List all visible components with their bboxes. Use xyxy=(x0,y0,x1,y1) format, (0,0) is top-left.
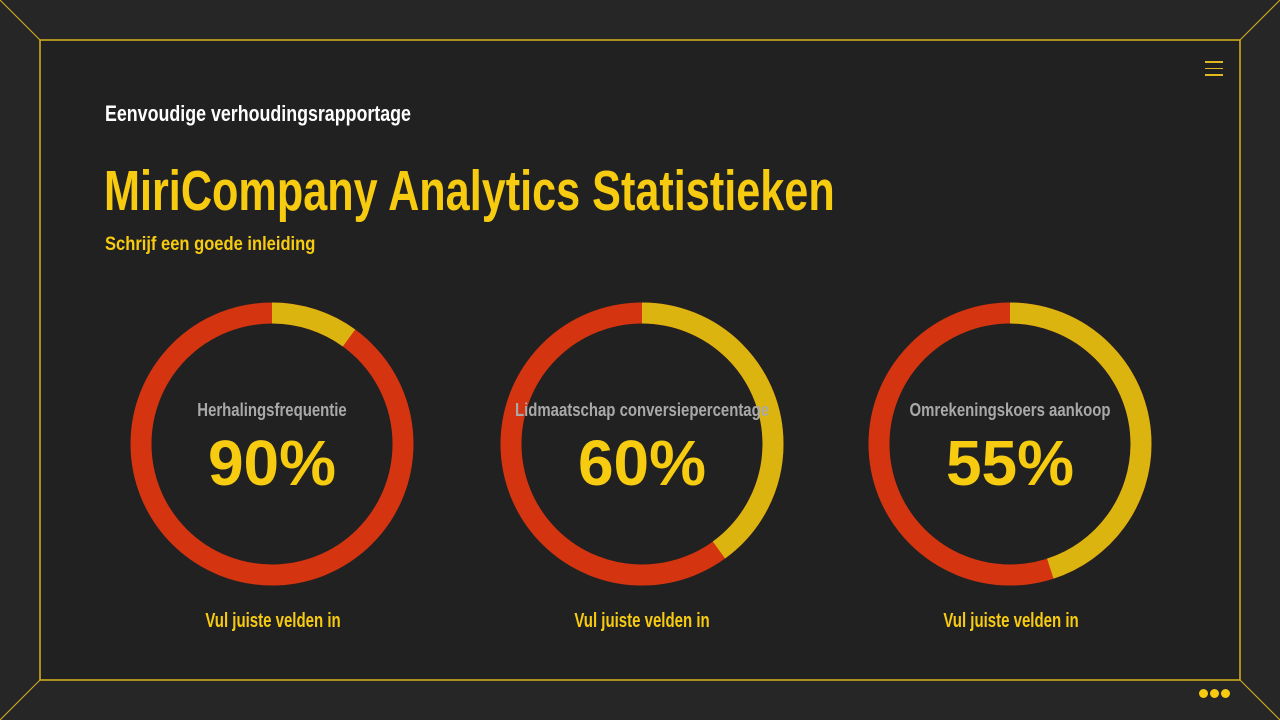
value 1: 90% xyxy=(208,427,336,499)
label 2: Lidmaatschap conversiepercentage xyxy=(515,400,769,420)
icon: dots xyxy=(1199,689,1230,698)
label 1: Herhalingsfrequentie xyxy=(197,400,347,420)
intro: Schrijf een goede inleiding xyxy=(105,234,315,255)
value 3: 55% xyxy=(946,427,1074,499)
subtitle top: Eenvoudige verhoudingsrapportage xyxy=(105,101,411,126)
caption 1: Vul juiste velden in xyxy=(205,610,341,632)
donut 1 xyxy=(141,313,403,575)
donut 3 xyxy=(879,313,1141,575)
title: MiriCompany Analytics Statistieken xyxy=(104,159,835,223)
icon: menu xyxy=(1205,61,1223,76)
donut 2 xyxy=(511,313,773,575)
caption 2: Vul juiste velden in xyxy=(574,610,710,632)
label 3: Omrekeningskoers aankoop xyxy=(910,400,1110,420)
value 2: 60% xyxy=(578,427,706,499)
caption 3: Vul juiste velden in xyxy=(943,610,1079,632)
